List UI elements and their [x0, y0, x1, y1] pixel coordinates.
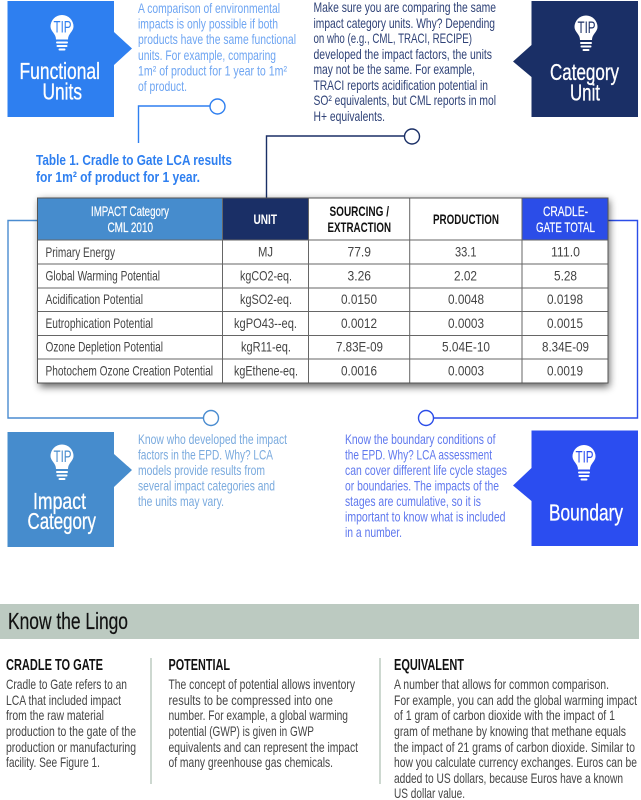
table row: acidification potential: 0.0198	[547, 291, 583, 307]
table row: ozone depletion potential	[46, 338, 589, 354]
table header row: UNIT	[254, 211, 277, 227]
table row: ozone depletion potential: Ozone Depletion Potential	[46, 338, 163, 354]
text block: boundary explanation: or boundaries. The impacts of the	[345, 478, 499, 494]
heading: impact category: Category	[28, 508, 96, 534]
icon: impact category light bulb: TIP	[54, 447, 72, 466]
definition: cradle to gate: production or manufacturing	[6, 739, 136, 755]
table row: primary energy: Primary Energy	[46, 244, 115, 260]
definition: cradle to gate: Cradle to Gate refers to an	[6, 676, 127, 692]
table row: global warming potential: kgCO2-eq.	[240, 268, 292, 284]
definition: potential: of many greenhouse gas chemicals.	[168, 754, 333, 770]
text block: category unit explanation: may not be the same. For example,	[314, 61, 475, 77]
icon: category unit light bulb: TIP	[578, 18, 596, 37]
table row: primary energy: 33.1	[455, 244, 477, 260]
section band: know the lingo: Know the Lingo	[8, 608, 128, 634]
table header row: CRADLE-	[543, 203, 588, 219]
text block: category unit explanation: on who (e.g., CML, TRACI, RECIPE)	[314, 30, 472, 46]
text block: functional units explanation: products have the same functional	[138, 31, 296, 47]
panel: category unit tip	[513, 1, 638, 117]
text block: impact category explanation: several impact categories and	[138, 478, 275, 494]
table row: ozone depletion potential: 7.83E-09	[336, 338, 383, 354]
text block: category unit explanation: developed the impact factors, the units	[314, 46, 492, 62]
heading: functional units	[20, 58, 100, 104]
table row: ozone depletion potential: kgR11-eq.	[241, 338, 291, 354]
table header row: SOURCING /	[330, 203, 389, 219]
text block: boundary explanation	[345, 431, 507, 540]
heading: impact category: Impact	[33, 488, 86, 514]
definition: cradle to gate: LCA that included impact	[6, 692, 121, 708]
definition: potential	[168, 657, 358, 770]
section band: know the lingo	[0, 604, 639, 639]
text block: category unit explanation: H+ equivalents.	[314, 108, 385, 124]
text block: boundary explanation: can cover different life cycle stages	[345, 462, 507, 478]
heading: functional units: Functional	[20, 58, 100, 84]
panel: boundary tip	[513, 430, 638, 546]
table title	[36, 152, 232, 186]
definition: cradle to gate: production to the gate of the	[6, 723, 136, 739]
table row: eutrophication potential: Eutrophication Potential	[46, 315, 153, 331]
table title: for 1m² of product for 1 year.	[36, 169, 200, 186]
table header row: IMPACT Category	[91, 203, 169, 219]
text block: boundary explanation: important to know what is included	[345, 508, 506, 524]
text block: category unit explanation: TRACI reports acidification potential in	[314, 77, 488, 93]
text block: category unit explanation: impact category units. Why? Depending	[314, 15, 495, 31]
table row: photochem ozone creation potential: 0.0019	[547, 362, 583, 378]
table row: acidification potential: kgSO2-eq.	[240, 291, 292, 307]
text block: functional units explanation: of product.	[138, 78, 187, 94]
table header row	[91, 203, 595, 235]
table row: global warming potential: 2.02	[454, 268, 477, 284]
panel: functional units tip	[8, 1, 132, 117]
table row: eutrophication potential	[46, 315, 583, 331]
table: LCA results	[38, 198, 610, 387]
table row: eutrophication potential: 0.0003	[448, 315, 484, 331]
table row: primary energy: MJ	[258, 244, 273, 260]
heading: category unit: Unit	[570, 80, 600, 106]
definition: cradle to gate: from the raw material	[6, 707, 104, 723]
text block: category unit explanation: SO² equivalents, but CML reports in mol	[314, 92, 496, 108]
table row: global warming potential: 5.28	[554, 268, 577, 284]
definition: equivalent	[394, 657, 637, 800]
text block: functional units explanation: 1m² of product for 1 year to 1m²	[138, 62, 287, 78]
table row: eutrophication potential: 0.0015	[547, 315, 583, 331]
definition: potential: POTENTIAL	[168, 657, 230, 674]
table row: photochem ozone creation potential: 0.0003	[448, 362, 484, 378]
text block: impact category explanation	[138, 431, 287, 509]
text block: category unit explanation	[314, 0, 496, 124]
table header row: GATE TOTAL	[536, 219, 595, 235]
table row: acidification potential	[46, 291, 583, 307]
connector: impact category	[8, 220, 218, 426]
definition: potential: number. For example, a global warming	[168, 707, 348, 723]
heading: functional units: Units	[42, 78, 82, 104]
definition: equivalent: EQUIVALENT	[394, 657, 464, 674]
text block: impact category explanation: the units may vary.	[138, 493, 224, 509]
definition: potential: potential (GWP) is given in GWP	[168, 723, 314, 739]
table row: photochem ozone creation potential: 0.0016	[341, 362, 377, 378]
definition: potential: results to be compressed into one	[168, 692, 333, 708]
table row: ozone depletion potential: 5.04E-10	[442, 338, 490, 354]
text block: functional units explanation: A comparison of environmental	[138, 0, 280, 16]
text block: functional units explanation	[138, 0, 296, 94]
text block: functional units explanation: units. For example, comparing	[138, 47, 276, 63]
table row: eutrophication potential: kgPO43--eq.	[234, 315, 297, 331]
panel: impact category tip	[8, 432, 132, 547]
definition: potential: The concept of potential allows inventory	[168, 676, 355, 692]
icon: boundary light bulb: TIP	[576, 448, 594, 466]
table header row: CML 2010	[108, 219, 153, 235]
table row: primary energy: 77.9	[348, 244, 371, 260]
table row: acidification potential: 0.0048	[448, 291, 484, 307]
text block: impact category explanation: models provide results from	[138, 462, 265, 478]
table row: photochem ozone creation potential: kgEthene-eq.	[234, 362, 298, 378]
definition: cradle to gate: CRADLE TO GATE	[6, 657, 103, 674]
text block: impact category explanation: Know who developed the impact	[138, 431, 287, 447]
heading: category unit	[550, 59, 619, 106]
table row: acidification potential: Acidification Potential	[46, 291, 143, 307]
definition: cradle to gate	[6, 657, 136, 770]
table row: global warming potential: 3.26	[348, 268, 371, 284]
heading: category unit: Category	[550, 59, 619, 85]
text block: impact category explanation: factors in the EPD. Why? LCA	[138, 446, 273, 462]
table header row: EXTRACTION	[328, 219, 391, 235]
table row: eutrophication potential: 0.0012	[341, 315, 377, 331]
connector: boundary	[418, 220, 638, 426]
definition: potential: equivalents and can represent the impact	[168, 739, 358, 755]
text block: functional units explanation: impacts is only possible if both	[138, 16, 278, 32]
definition: cradle to gate: facility. See Figure 1.	[6, 754, 100, 770]
icon: functional units light bulb: TIP	[54, 18, 72, 36]
connector: functional units to table title	[138, 99, 225, 143]
table title: Table 1. Cradle to Gate LCA results	[36, 152, 232, 169]
table header row: PRODUCTION	[433, 211, 499, 227]
text block: boundary explanation: in a number.	[345, 524, 402, 540]
table row: acidification potential: 0.0150	[341, 291, 377, 307]
connector: category unit to table	[266, 129, 420, 198]
table row: ozone depletion potential: 8.34E-09	[542, 338, 589, 354]
table row: global warming potential: Global Warming Potential	[46, 268, 160, 284]
table row: primary energy	[46, 244, 580, 260]
heading: impact category	[28, 488, 96, 534]
table row: global warming potential	[46, 268, 577, 284]
table row: primary energy: 111.0	[551, 244, 580, 260]
table row: photochem ozone creation potential: Photochem Ozone Creation Potential	[46, 362, 213, 378]
text block: boundary explanation: the EPD. Why? LCA assessment	[345, 446, 492, 462]
text block: boundary explanation: stages are cumulative, so it is	[345, 493, 481, 509]
text block: boundary explanation: Know the boundary conditions of	[345, 431, 496, 447]
table row: photochem ozone creation potential	[46, 362, 583, 378]
